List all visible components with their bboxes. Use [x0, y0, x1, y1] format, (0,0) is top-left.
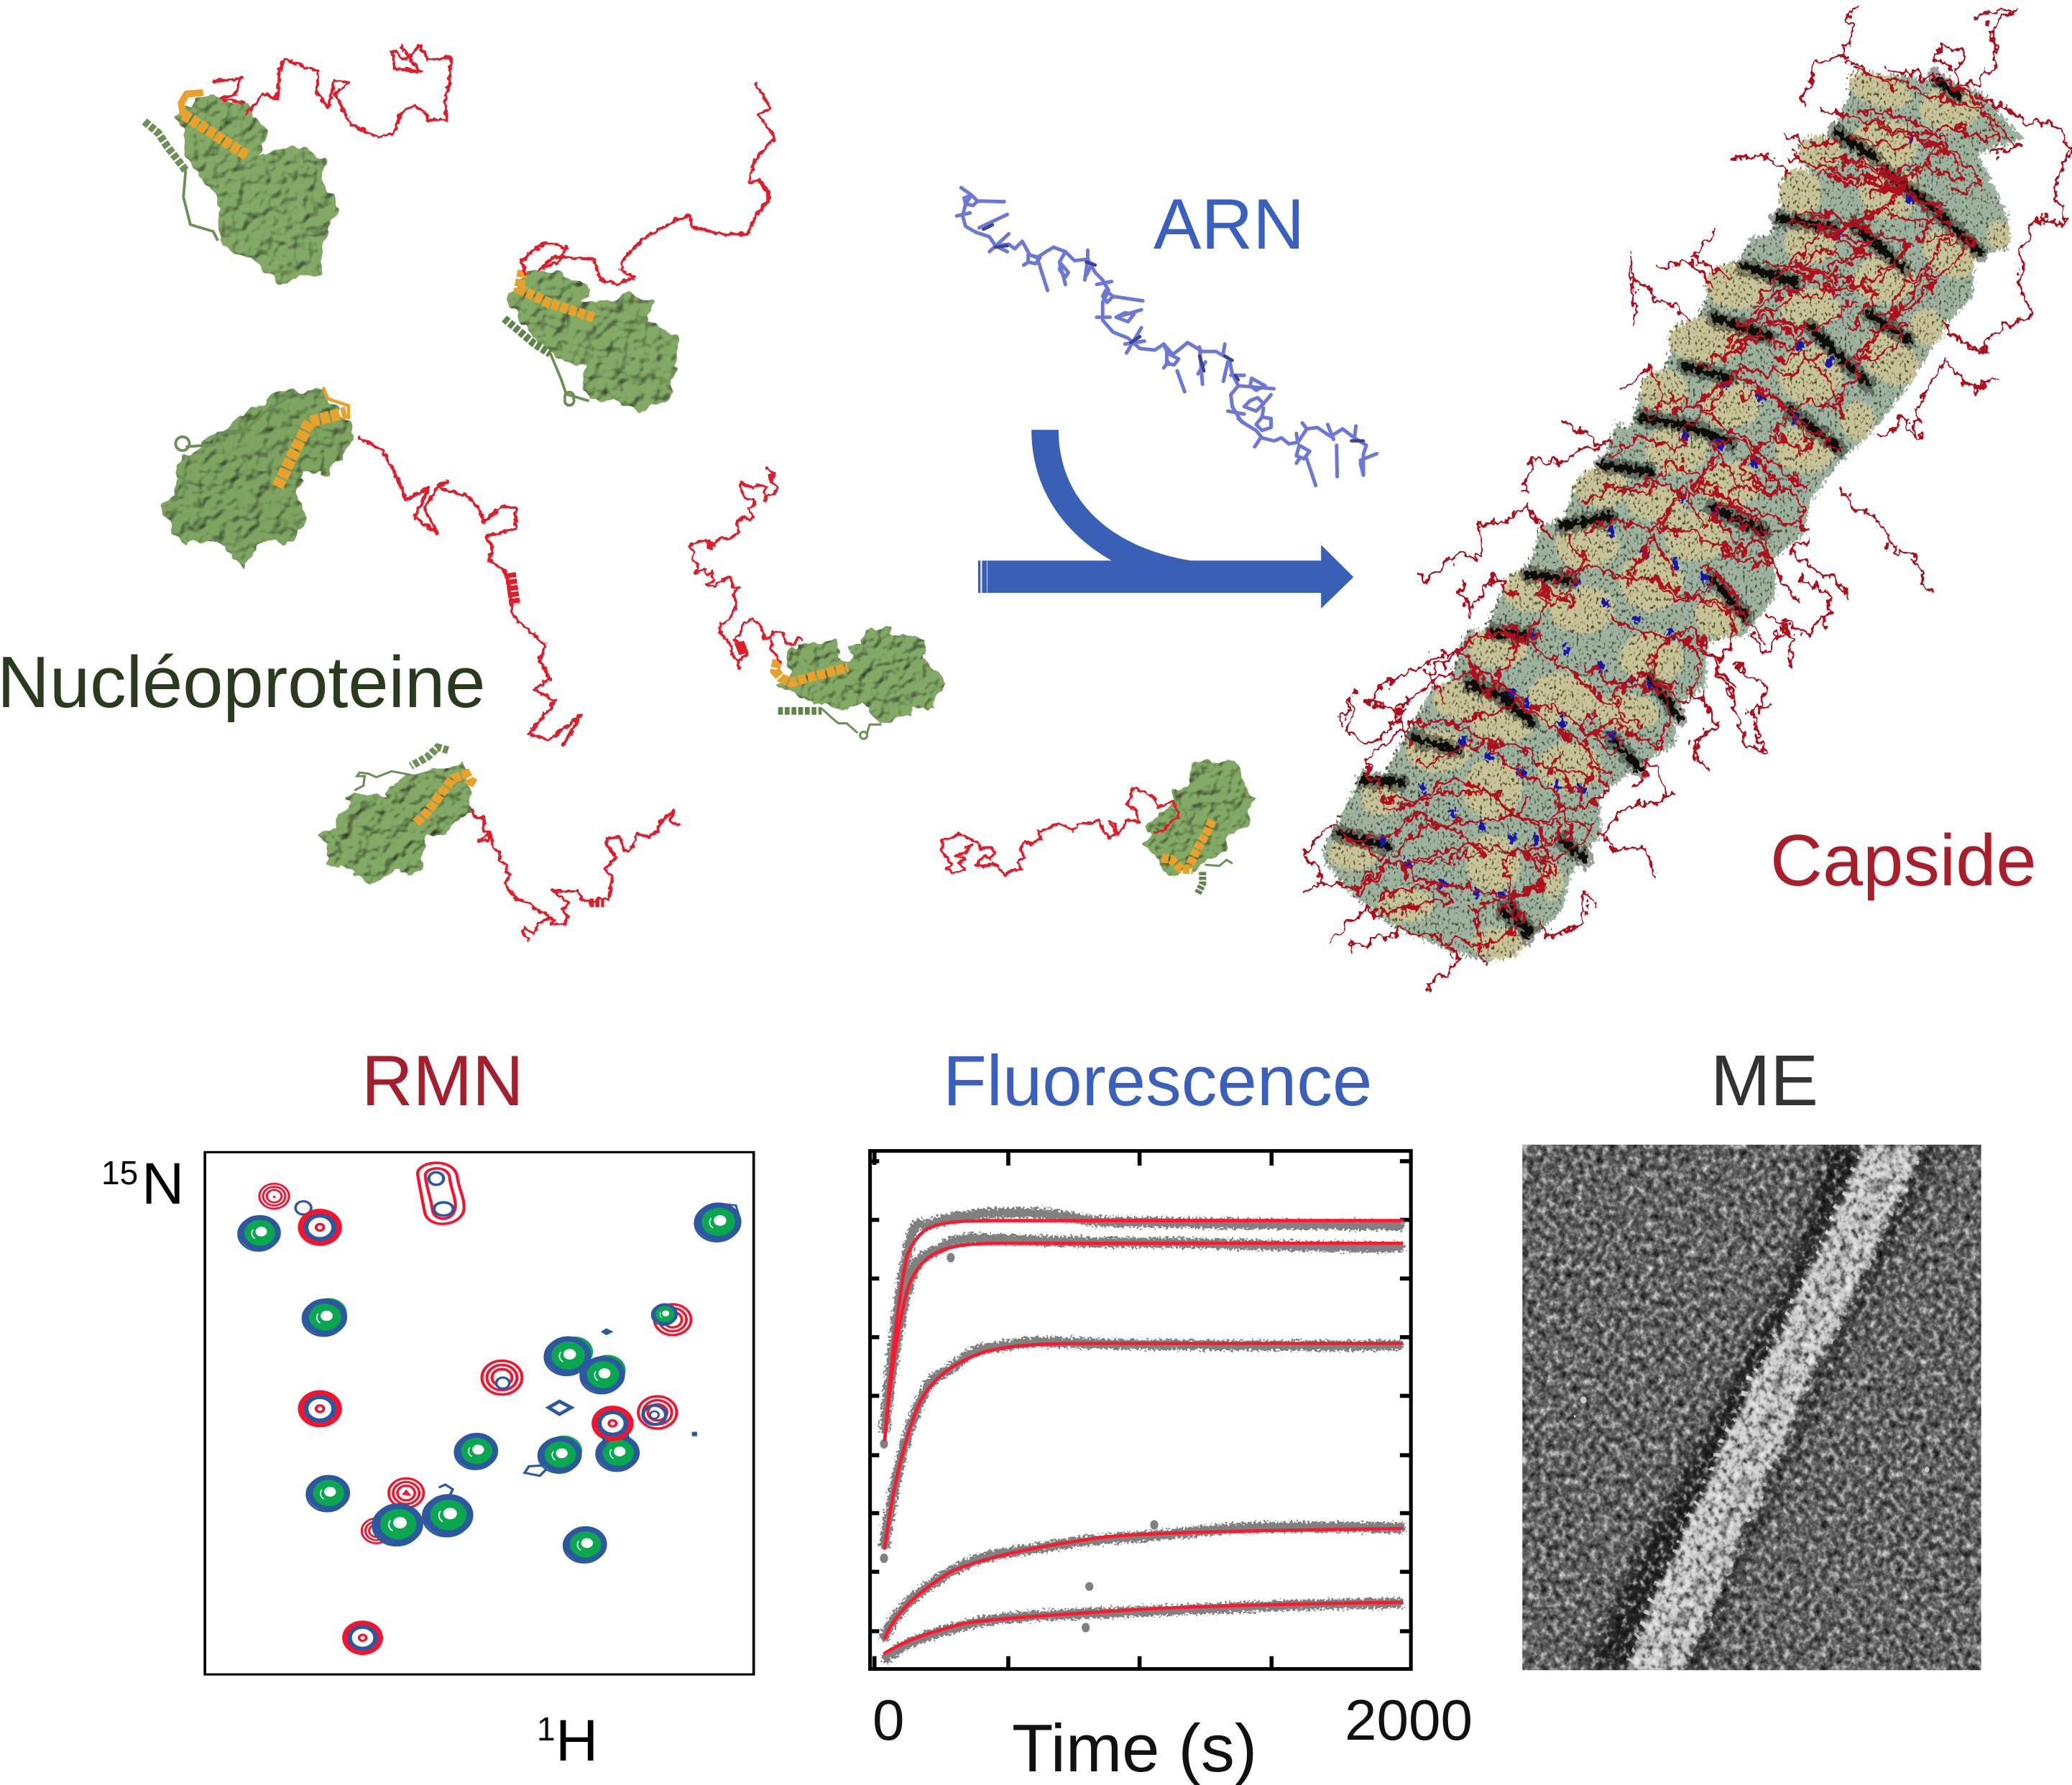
capsid base band — [1323, 74, 2023, 962]
protein 4 green helix — [778, 699, 821, 722]
filament inner mottling — [1659, 1145, 1896, 1670]
RNA dark shaded joints — [983, 225, 1363, 441]
bright particles — [1574, 1320, 1930, 1472]
gray outlier points — [880, 1253, 1159, 1633]
RNA backbone — [961, 188, 1366, 475]
filament — [1628, 1145, 1920, 1670]
protein 1 green helix — [144, 121, 185, 170]
capsid dark grooves — [1338, 77, 1981, 937]
protein 5 with tail — [320, 747, 679, 941]
x tick label: 2000: 2000 — [1345, 1688, 1473, 1752]
protein 2 surface — [507, 270, 678, 415]
protein 5 surface — [320, 763, 472, 887]
protein 1 orange turn — [181, 93, 203, 116]
axis label: 1H: H — [556, 1708, 598, 1774]
filament dark halo left — [1584, 1145, 1868, 1670]
protein 5 red tail — [472, 808, 679, 941]
micrograph image — [1522, 1145, 1981, 1670]
protein 3 red short helix — [510, 573, 515, 605]
interior tails — [1343, 109, 1984, 918]
protein 2 green tail — [550, 353, 589, 405]
protein 2 orange helix — [519, 270, 594, 318]
gray data points — [885, 1213, 1401, 1658]
curved arrow branch — [1031, 430, 1197, 561]
protein 4 red blobs — [706, 472, 776, 655]
capsid helical assembly — [1304, 6, 2071, 987]
protein 2 with tail — [505, 83, 775, 415]
speckle noise — [1522, 1145, 1981, 1670]
axis label superscript 1: 1 — [537, 1710, 556, 1748]
filament dark halo right — [1681, 1145, 1946, 1670]
filament body — [1628, 1145, 1920, 1670]
peak cluster: red and blue upper-left — [238, 1184, 342, 1251]
outer tails — [1304, 6, 2071, 987]
spectrum frame — [205, 1152, 754, 1674]
protein 5 green helix — [411, 747, 448, 766]
small blue contours — [439, 1329, 696, 1495]
straight arrow shaft stripes — [978, 561, 987, 593]
RNA bases — [957, 195, 1377, 486]
protein 3 orange turn — [323, 387, 349, 420]
protein 4 green tail — [821, 709, 882, 739]
electron micrograph — [1522, 1145, 1981, 1670]
micrograph background — [1522, 1145, 1981, 1670]
protein 2 red tail — [520, 83, 775, 284]
capsid RNA blue dots — [1383, 138, 1912, 895]
protein 4 orange helix — [775, 660, 848, 683]
capsid khaki subunits — [1331, 69, 2008, 956]
RNA strand — [957, 188, 1377, 486]
axis ticks — [870, 1151, 1411, 1669]
protein 3 red tail — [358, 438, 581, 747]
fine grain noise — [1522, 1145, 1981, 1670]
protein 2 green helix — [505, 318, 550, 354]
protein 5 orange helix — [416, 774, 476, 823]
axis label: 15N: N — [142, 1151, 184, 1217]
protein 6 green tail — [1205, 860, 1233, 866]
interior tails shifted copy a — [1378, 70, 2018, 879]
protein 1 orange helix — [183, 114, 248, 156]
protein 3 with tail — [160, 387, 581, 747]
label: RMN: RMN — [362, 1041, 523, 1120]
peak: red dumbbell contour — [418, 1163, 464, 1224]
merging arrow — [978, 430, 1353, 609]
protein 1 green tail — [183, 170, 218, 241]
filament teeth left — [1628, 1145, 1868, 1670]
protein 5 green tail — [354, 771, 411, 790]
label: ME: ME — [1710, 1041, 1818, 1121]
protein 3 green tail — [175, 399, 287, 451]
protein 6 green helix — [1198, 872, 1202, 893]
protein 3 surface — [160, 389, 355, 568]
axis label superscript 15: 15 — [101, 1154, 138, 1191]
red fit curves — [885, 1221, 1401, 1653]
protein 3 orange helix — [277, 412, 346, 486]
NMR spectrum — [205, 1152, 754, 1674]
protein 6 red tail — [941, 788, 1179, 875]
protein 4 surface — [776, 625, 947, 726]
x axis title: Time (s) — [1012, 1710, 1257, 1785]
straight arrow with head — [987, 545, 1353, 609]
protein 4 red tail — [689, 467, 803, 668]
protein 6 orange helix — [1162, 821, 1212, 870]
protein 6 surface — [1143, 762, 1253, 878]
peak group: red with blue — [298, 1304, 691, 1655]
x tick label: 0: 0 — [872, 1688, 904, 1752]
peak group: green and blue central — [303, 1298, 637, 1563]
label: Nucléoproteine: Nucléoproteine — [0, 642, 485, 723]
protein 1 surface — [177, 96, 339, 284]
capsid protein surface — [1323, 69, 2023, 962]
protein 6 with tail — [941, 762, 1253, 893]
protein 4 with tail — [689, 467, 947, 739]
capsid disordered red tails — [1304, 6, 2071, 987]
chart frame — [870, 1151, 1411, 1669]
label: Capside: Capside — [1770, 821, 2037, 901]
fluorescence kinetics chart — [870, 1151, 1411, 1669]
peak: upper-right green blue — [695, 1204, 740, 1242]
label: ARN: ARN — [1154, 185, 1304, 264]
protein 5 red short helix — [590, 890, 604, 915]
protein 1 with tail — [144, 46, 451, 284]
protein 1 red tail — [213, 46, 451, 137]
interior tails shifted copy b — [1314, 157, 1953, 966]
label: Fluorescence: Fluorescence — [943, 1041, 1372, 1121]
capsid groove shadows — [1338, 77, 1981, 937]
filament teeth right — [1681, 1145, 1920, 1670]
